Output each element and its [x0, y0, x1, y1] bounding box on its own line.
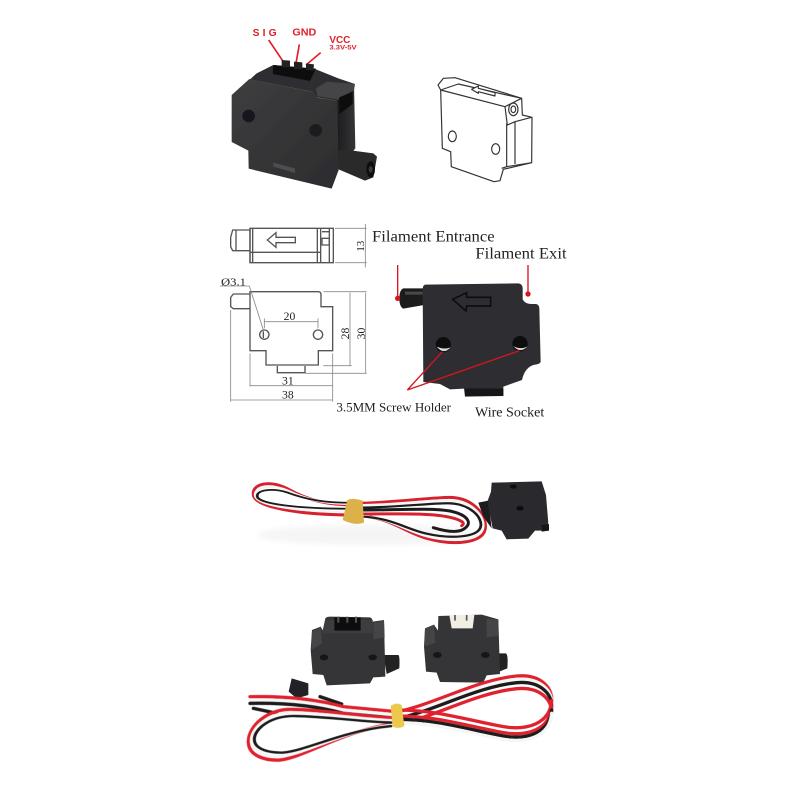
left module — [311, 617, 400, 685]
photo: module with coiled cable — [253, 481, 549, 545]
feature labels: Filament Exit — [475, 246, 567, 263]
feature labels — [336, 229, 567, 420]
pin labels: GND — [292, 28, 317, 39]
dimension 13 — [335, 224, 367, 267]
feature labels: Filament Entrance — [372, 229, 495, 246]
cable set — [248, 676, 552, 760]
right module — [424, 615, 508, 683]
dimension labels: 31 — [282, 375, 294, 388]
red pointers — [395, 265, 531, 390]
dimension: 13: 13 — [355, 240, 367, 252]
side view drawing — [231, 224, 367, 267]
dimension diagrams and labelled module — [220, 224, 567, 420]
cable tie — [391, 704, 404, 728]
module body — [232, 60, 377, 189]
pin labels: S I G — [253, 28, 277, 39]
pin labels: 3.3V-5V — [329, 45, 358, 52]
cable loops — [253, 484, 485, 543]
dimension labels: 20 — [284, 310, 295, 323]
feature labels: Wire Socket — [475, 405, 545, 420]
photo: two modules and cable set — [248, 615, 552, 760]
dimension labels: 28 — [339, 328, 352, 339]
photo: sensor module with pin labels — [232, 28, 377, 189]
cable module — [478, 481, 549, 539]
pin labels — [253, 28, 358, 52]
cable tie — [343, 499, 364, 524]
pin pointers — [269, 40, 321, 65]
pin labels: VCC — [329, 35, 351, 46]
dimension labels — [221, 276, 368, 401]
labelled module photo — [399, 283, 541, 397]
feature labels: 3.5MM Screw Holder — [336, 401, 451, 415]
plug — [289, 678, 308, 698]
ground shadow — [257, 525, 483, 545]
front view drawing — [220, 286, 367, 402]
dimension labels: Ø3.1 — [221, 276, 246, 288]
dimension labels: 38 — [282, 388, 294, 401]
line drawing: module isometric outline — [438, 78, 532, 182]
dimension labels: 30 — [355, 328, 368, 339]
